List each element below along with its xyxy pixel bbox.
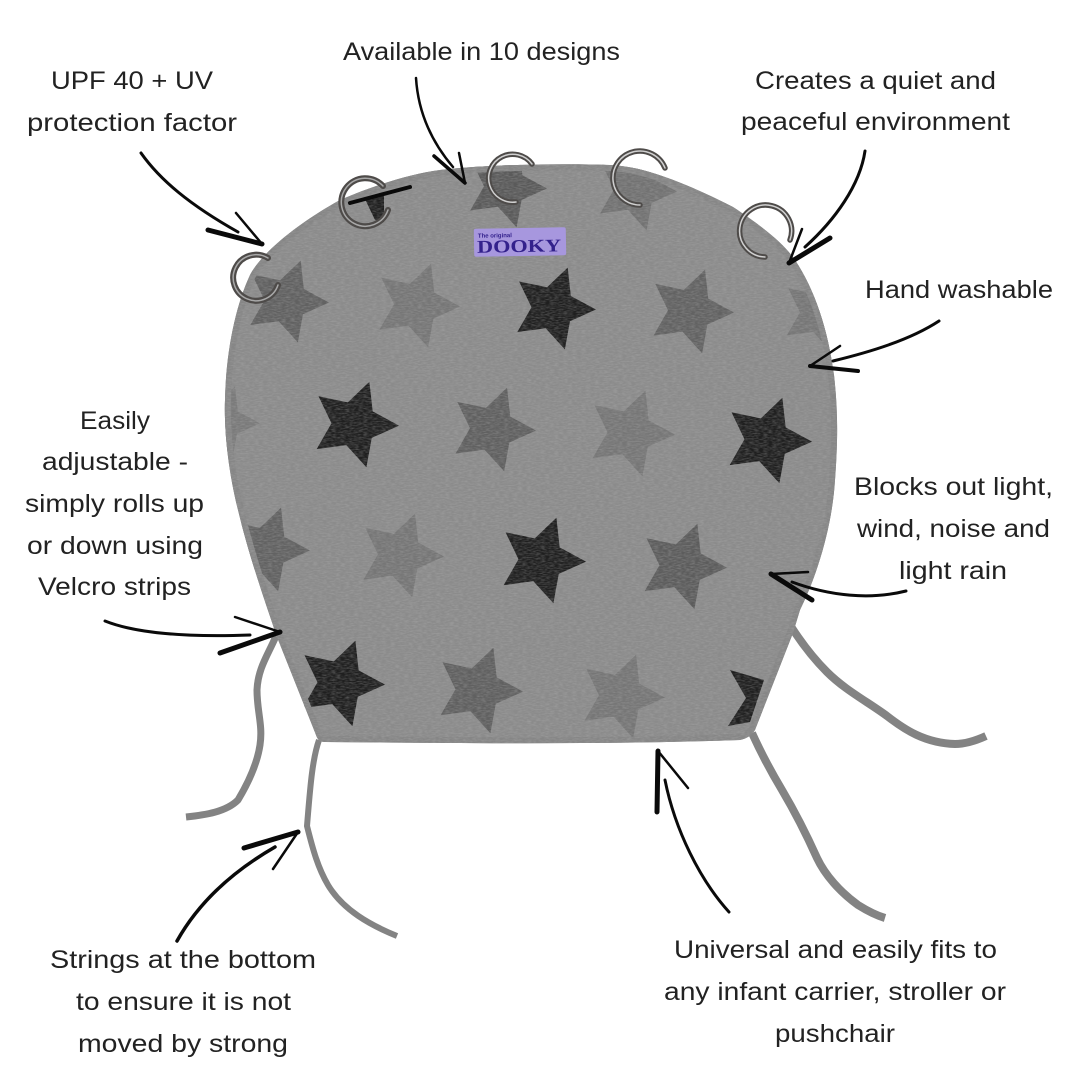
text: easily adjustable: Easily	[80, 407, 151, 435]
text: blocks light: Blocks out light,	[854, 473, 1053, 501]
text: blocks light: light rain	[899, 557, 1007, 585]
text: quiet environment: Creates a quiet and	[755, 67, 996, 95]
text: hand washable: Hand washable	[865, 276, 1053, 304]
arrow: hand washable	[810, 321, 939, 371]
text: easily adjustable: Velcro strips	[38, 573, 191, 601]
text: quiet environment: peaceful environment	[741, 108, 1010, 136]
label: Dooky brand tag: The original	[478, 233, 512, 240]
text: UPF protection	[27, 67, 237, 137]
arrow: available designs	[350, 78, 465, 203]
text: universal fit: Universal and easily fits to	[674, 936, 997, 964]
arrow: strings	[177, 832, 298, 941]
arrow: velcro strips	[105, 617, 280, 653]
text: universal fit: any infant carrier, stroller or	[664, 978, 1006, 1006]
text: blocks light	[854, 473, 1053, 585]
text: blocks light: wind, noise and	[856, 515, 1050, 543]
text: easily adjustable: or down using	[27, 532, 203, 560]
arrow: blocks light	[771, 572, 906, 600]
text: easily adjustable: simply rolls up	[25, 490, 204, 518]
label: Dooky brand tag	[474, 227, 566, 257]
label: Dooky brand tag: DOOKY	[477, 235, 561, 257]
text: strings	[50, 946, 316, 1058]
text: UPF protection: UPF 40 + UV	[51, 67, 213, 95]
arrow: UPF protection	[141, 153, 262, 244]
text: easily adjustable: adjustable -	[42, 448, 188, 476]
star pattern	[178, 134, 869, 744]
text: strings: Strings at the bottom	[50, 946, 316, 974]
arrow: quiet environment	[789, 151, 865, 263]
sun shade product	[178, 134, 986, 936]
fabric panel	[224, 164, 838, 744]
text: universal fit: pushchair	[775, 1020, 895, 1048]
text: strings: to ensure it is not	[76, 988, 291, 1016]
text: UPF protection: protection factor	[27, 109, 237, 137]
text: universal fit	[664, 936, 1006, 1048]
arrow: universal fit	[657, 751, 729, 912]
metal rings	[233, 151, 792, 301]
text: available designs: Available in 10 designs	[343, 38, 620, 66]
text: strings: moved by strong	[78, 1030, 288, 1058]
text: quiet environment	[741, 67, 1010, 136]
text: easily adjustable	[25, 407, 204, 601]
strings	[186, 628, 986, 936]
